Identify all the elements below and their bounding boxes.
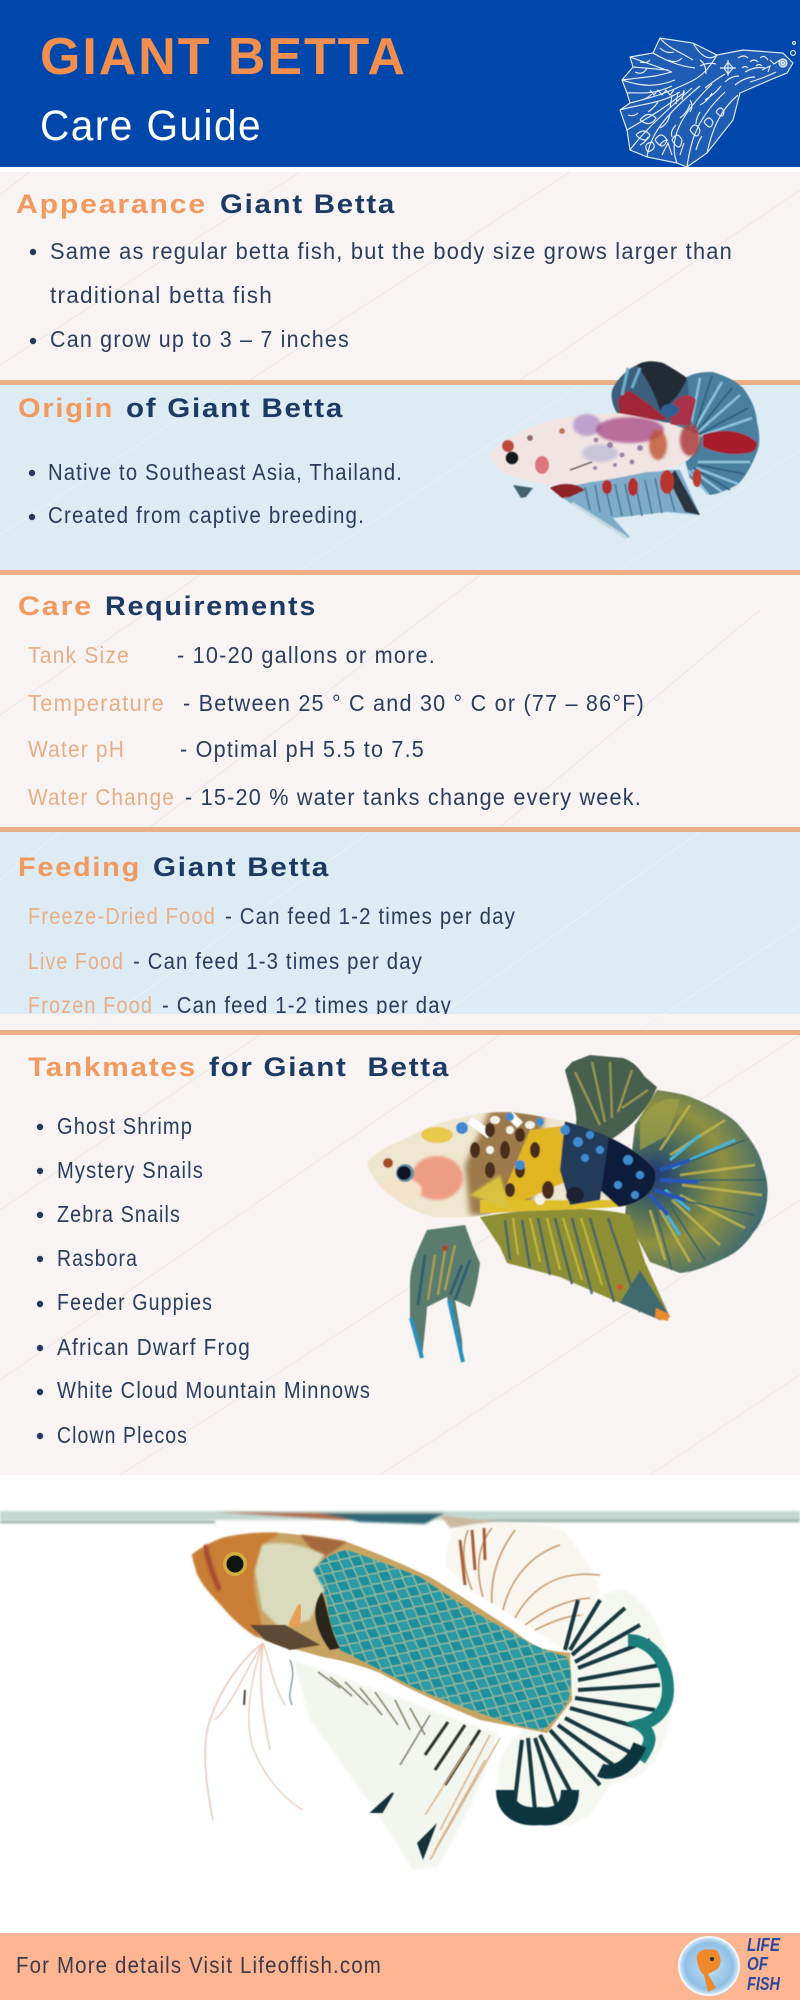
heading: origin: Origin <box>18 393 114 423</box>
bullet list: tankmates: Mystery Snails <box>57 1157 204 1183</box>
dorsal fin <box>612 361 692 425</box>
footer banner <box>0 1933 800 2000</box>
care row: water pH: Water pH <box>28 736 125 762</box>
heading: origin <box>18 393 344 423</box>
dorsal fin <box>565 1055 657 1140</box>
ventral fins <box>410 1225 480 1362</box>
panel: appearance <box>0 172 800 380</box>
feeding row: live food: Live Food <box>28 948 124 974</box>
bullet list: tankmates: Ghost Shrimp <box>57 1113 193 1139</box>
bullet list: tankmates: African Dwarf Frog <box>57 1334 251 1360</box>
body <box>367 1112 656 1218</box>
logo: life of fish <box>679 1935 781 1995</box>
red spots <box>602 480 612 494</box>
pectoral fin <box>513 485 533 498</box>
feeding row: live food: - Can feed 1-3 times per day <box>133 948 423 974</box>
divider <box>0 380 800 385</box>
bullet list: appearance: traditional betta fish <box>50 282 273 308</box>
care row: tank size: Tank Size <box>28 642 130 668</box>
heading: feeding: Giant Betta <box>153 852 330 882</box>
body <box>490 413 700 486</box>
heading: appearance: Appearance <box>16 189 207 219</box>
eye <box>223 1552 247 1576</box>
bullet list: tankmates: Zebra Snails <box>57 1201 181 1227</box>
panel: care requirements <box>0 575 800 827</box>
heading: tankmates <box>28 1052 450 1082</box>
feeding row: frozen food <box>30 996 451 1014</box>
bullet list: origin: Native to Southeast Asia, Thailand. <box>48 459 403 485</box>
bullet list: tankmates <box>37 1113 371 1448</box>
bullet list: appearance: Same as regular betta fish, but the body size grows larger than <box>50 238 733 264</box>
feeding row: freeze-dried food <box>28 903 516 929</box>
divider <box>0 570 800 575</box>
care row: tank size: - 10-20 gallons or more. <box>177 642 436 668</box>
care row: water pH <box>28 736 425 762</box>
care row: water pH: - Optimal pH 5.5 to 7.5 <box>180 736 425 762</box>
dorsal fin <box>446 1523 600 1650</box>
heading: care requirements: Care <box>18 591 93 621</box>
eye <box>506 452 518 464</box>
heading: care requirements: Requirements <box>105 591 317 621</box>
bullet list: origin <box>29 459 403 528</box>
anal fin <box>293 1660 497 1870</box>
logo: life of fish: OF <box>747 1954 769 1974</box>
bullet list: origin: Created from captive breeding. <box>48 502 365 528</box>
logo: life of fish: LIFE <box>747 1935 781 1955</box>
illustration: water surface with teal betta <box>0 1511 800 1870</box>
care row: tank size <box>28 642 436 668</box>
tail fin <box>498 1590 672 1825</box>
heading: tankmates: Tankmates <box>28 1052 197 1082</box>
anal fin <box>550 470 700 538</box>
tail fin <box>675 372 759 495</box>
divider <box>0 1030 800 1035</box>
water line <box>0 1511 800 1528</box>
panel: feeding <box>0 832 800 1030</box>
footer text: For More details Visit Lifeoffish.com <box>16 1952 382 1978</box>
panel: tankmates <box>0 1035 800 1475</box>
title: Giant Betta: GIANT BETTA <box>40 28 407 86</box>
heading: appearance: Giant Betta <box>220 189 396 219</box>
eye <box>396 1164 414 1182</box>
heading: care requirements <box>18 591 317 621</box>
care row: temperature: - Between 25 ° C and 30 ° C or (77 – 86°F) <box>183 690 645 716</box>
bullet list: appearance <box>30 238 733 352</box>
feeding row: frozen food: - Can feed 1-2 times per day <box>162 992 452 1018</box>
pelvic fin threads <box>205 1643 303 1820</box>
divider <box>0 827 800 832</box>
care row: temperature: Temperature <box>28 690 165 716</box>
illustration: red and blue koi betta <box>490 361 759 538</box>
logo: life of fish: FISH <box>747 1974 781 1994</box>
heading: appearance <box>16 189 396 219</box>
heading: tankmates: for Giant Betta <box>209 1052 450 1082</box>
icon: betta fish line drawing <box>620 38 795 167</box>
care row: water change: Water Change <box>28 784 175 810</box>
header banner <box>0 0 800 167</box>
heading: feeding: Feeding <box>18 852 141 882</box>
bullet list: tankmates: White Cloud Mountain Minnows <box>57 1377 371 1403</box>
care row: water change: - 15-20 % water tanks change every week. <box>185 784 642 810</box>
feeding row: live food <box>28 948 423 974</box>
feeding row: freeze-dried food: - Can feed 1-2 times per day <box>225 903 516 929</box>
heading: origin: of Giant Betta <box>126 393 344 423</box>
feeding row: frozen food: Frozen Food <box>28 992 153 1018</box>
illustration: yellow and blue koi betta <box>367 1055 768 1362</box>
bullet list: tankmates: Feeder Guppies <box>57 1289 213 1315</box>
bullet list: tankmates: Clown Plecos <box>57 1422 188 1448</box>
bullet list: appearance: Can grow up to 3 – 7 inches <box>50 326 350 352</box>
bullet list: tankmates: Rasbora <box>57 1245 138 1271</box>
body <box>192 1533 572 1733</box>
tail base blue spray <box>650 1160 698 1215</box>
heading: feeding <box>18 852 330 882</box>
anal fin <box>480 1209 670 1320</box>
tail fin <box>625 1090 768 1273</box>
panel: origin <box>0 385 800 570</box>
subtitle: Care Guide: Care Guide <box>40 102 262 150</box>
feeding row: freeze-dried food: Freeze-Dried Food <box>28 903 216 929</box>
